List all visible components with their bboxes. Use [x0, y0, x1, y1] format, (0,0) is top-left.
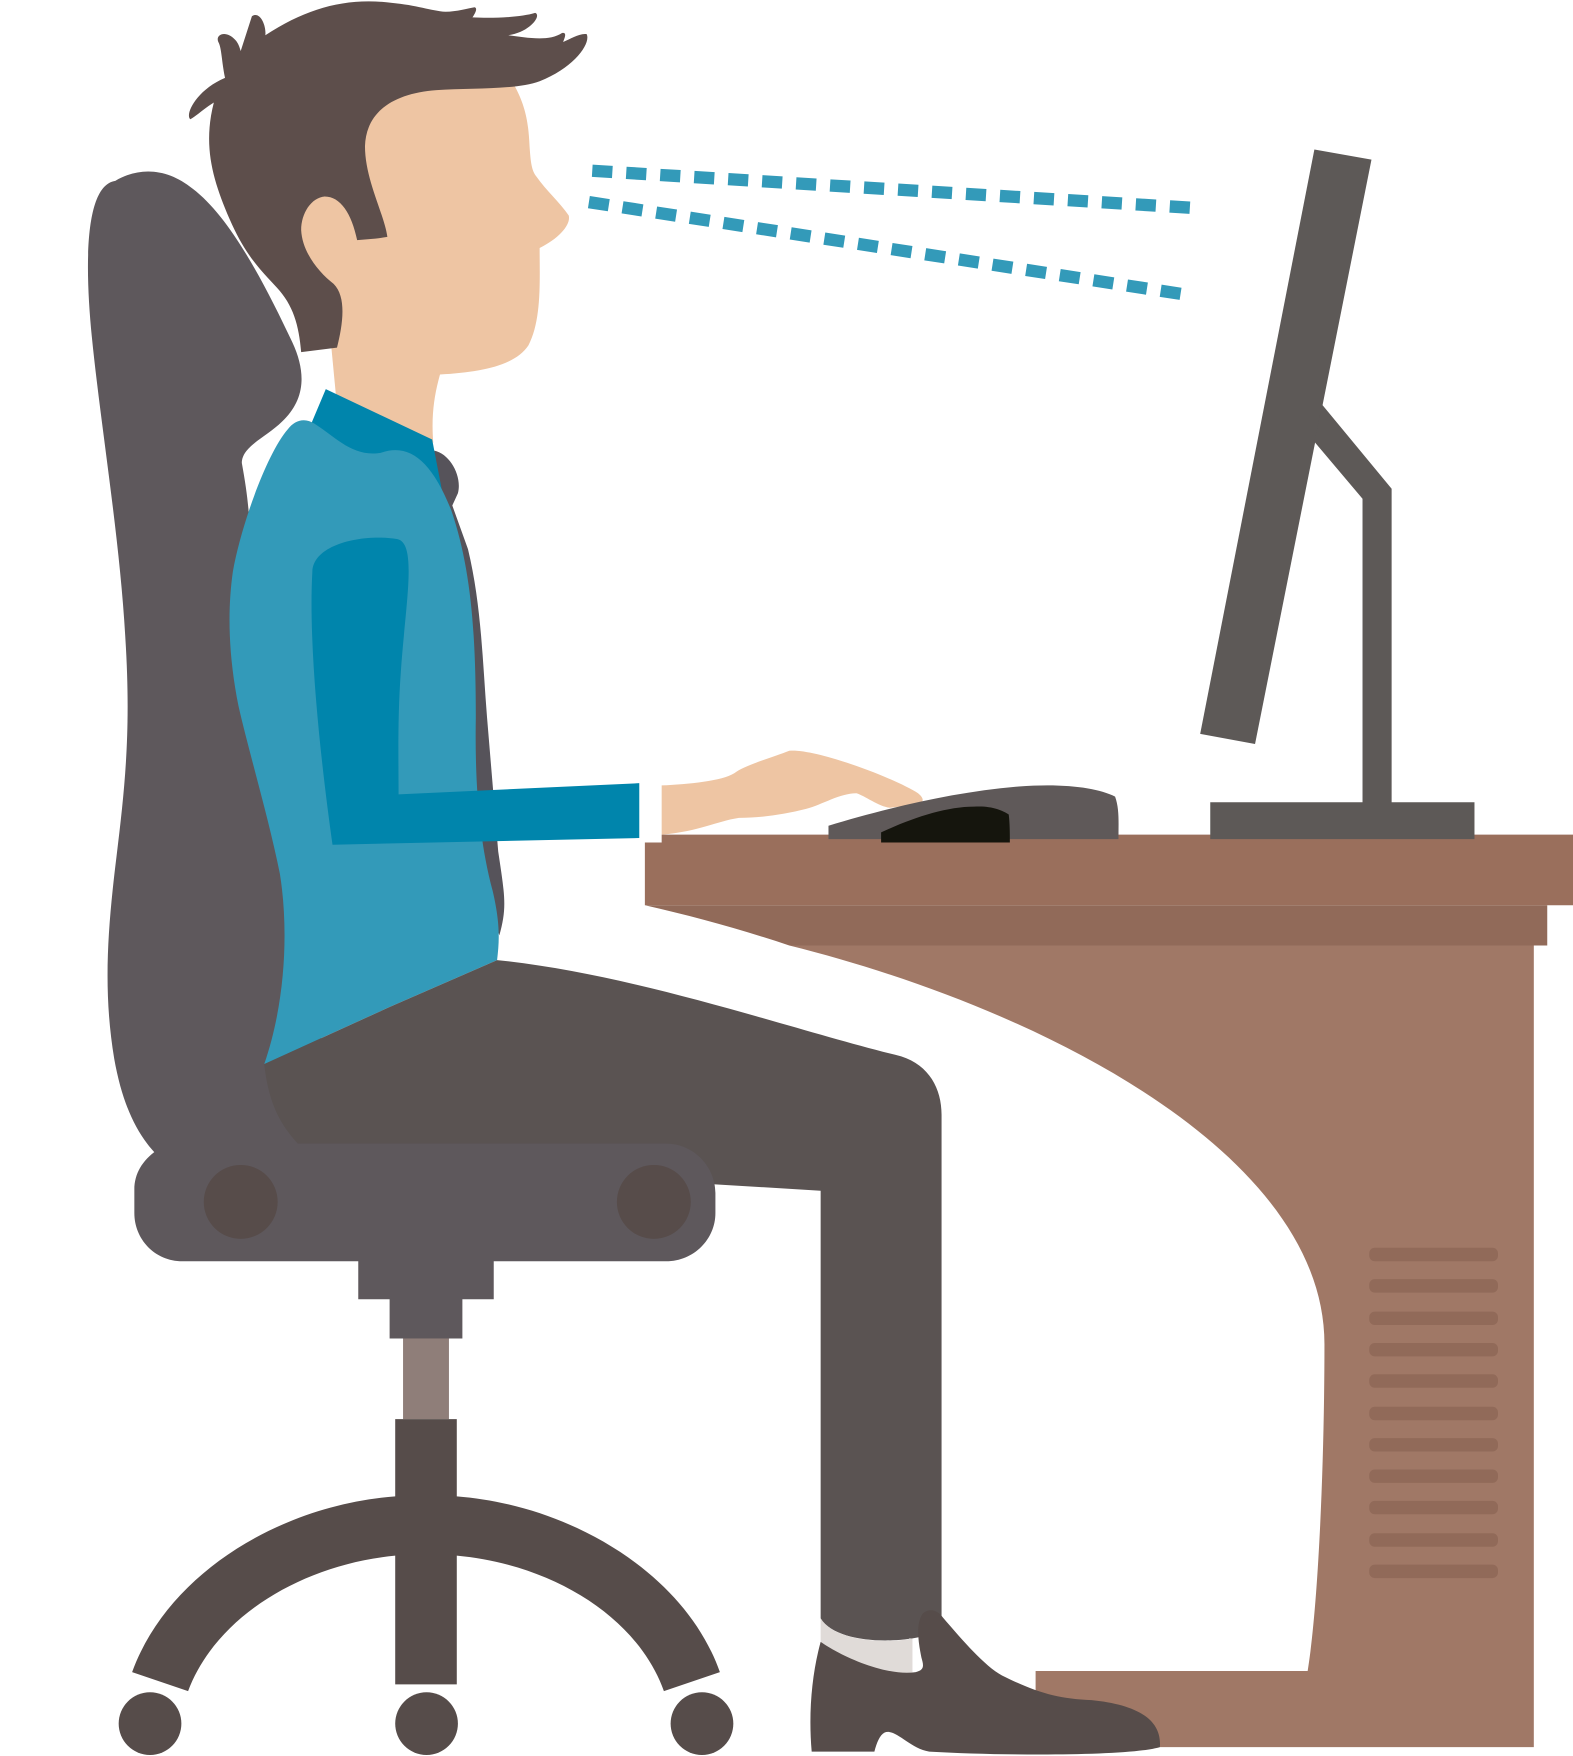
chair backrest: [88, 171, 336, 1165]
shirt collar: [308, 389, 449, 527]
desk: [645, 835, 1573, 1747]
trousers: [264, 960, 942, 1640]
line of sight dashes: [589, 171, 1190, 294]
desk underside: [645, 905, 1547, 946]
monitor stand: [1210, 405, 1474, 839]
seat knobs: [204, 1165, 278, 1239]
mouse pad: [828, 785, 1119, 839]
casters: [119, 1692, 181, 1755]
monitor: [1200, 149, 1474, 839]
jacket back lining: [434, 451, 504, 935]
sock gap: [909, 1639, 925, 1677]
mouse: [881, 807, 1010, 843]
star base: [132, 1419, 720, 1691]
gas lift post: [403, 1338, 449, 1419]
desk top: [645, 835, 1573, 905]
neck and head: [280, 85, 569, 443]
desk body: [789, 946, 1534, 1747]
chair seat: [134, 1144, 715, 1338]
hair: [189, 1, 587, 352]
seat cushion: [134, 1144, 715, 1338]
chair base: [119, 1338, 733, 1755]
shirt torso: [230, 420, 499, 1064]
desk vents: [1369, 1248, 1498, 1578]
monitor screen: [1200, 149, 1371, 744]
sock: [821, 1618, 912, 1674]
hand: [662, 751, 923, 835]
shirt sleeve: [312, 538, 639, 845]
shoe: [810, 1610, 1160, 1755]
